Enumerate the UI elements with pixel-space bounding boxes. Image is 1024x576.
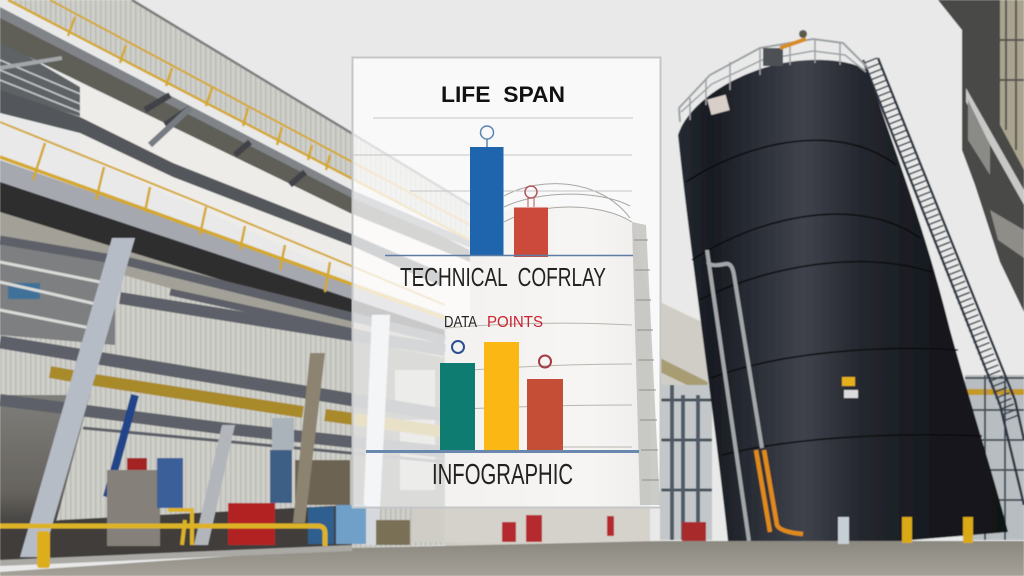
- red marker: [525, 186, 537, 207]
- red marker: [539, 356, 551, 368]
- blue marker: [452, 341, 464, 353]
- floor: [0, 541, 1024, 576]
- black tank: [678, 60, 1008, 541]
- yellow hazard label: [842, 377, 855, 386]
- glass and steel mass at far left: [0, 236, 115, 345]
- lower left wall: [0, 240, 445, 560]
- title: LIFE SPAN: [441, 82, 565, 107]
- red drum: [228, 503, 275, 545]
- white label: [844, 390, 858, 398]
- kerb: [0, 548, 352, 563]
- red fire equipment: [502, 515, 614, 542]
- baseline: [366, 450, 639, 453]
- orange-red bar: [527, 379, 563, 451]
- yellow pipe: [50, 372, 445, 432]
- right lower scaffold: [965, 375, 1024, 540]
- structural beams: [0, 58, 445, 462]
- lower bar chart: [366, 341, 639, 452]
- white wall between walkways: [80, 85, 470, 330]
- equipment below panel: [376, 508, 442, 545]
- lower left dark bay: [0, 395, 90, 545]
- second beam: [0, 90, 440, 286]
- red bar: [514, 208, 548, 257]
- dark interior behind overlay: [352, 335, 445, 507]
- chart gridlines: [352, 118, 633, 191]
- tank bollards: [838, 517, 973, 544]
- red vessel on rack: [127, 458, 147, 470]
- tank body: [678, 60, 1008, 541]
- upper deck underside: [0, 13, 470, 262]
- white tank dome railing seen through panel: [504, 184, 632, 222]
- technical overlay heading: TECHNICAL COFRLAY: [400, 262, 606, 292]
- blue riser: [107, 395, 135, 497]
- tank top railing: [679, 39, 868, 122]
- dark ground band: [0, 505, 352, 565]
- yellow ground railing: [0, 510, 325, 546]
- upper wall with corrugated cladding: [10, 0, 470, 240]
- roof equipment: [763, 30, 807, 66]
- white storage tank: [440, 205, 650, 560]
- yellow bollard: [37, 531, 50, 568]
- blue bar: [470, 147, 504, 256]
- teal bar: [440, 363, 475, 451]
- walkway two underside: [0, 178, 445, 345]
- upper left grey lattice: [0, 40, 85, 118]
- support columns: [20, 238, 390, 557]
- equipment rack: [107, 458, 183, 546]
- blue marker: [480, 126, 494, 147]
- yellow bar: [484, 342, 519, 451]
- walkway two deck: [0, 160, 445, 330]
- white tank ladder seen through panel: [632, 222, 660, 505]
- infographic content: [352, 82, 639, 491]
- right upper structure: [938, 0, 1024, 312]
- tank warning sign: [707, 95, 730, 115]
- access ladder: [863, 58, 1024, 505]
- translucent overlay panel: [352, 58, 660, 508]
- infographic heading: INFOGRAPHIC: [432, 459, 573, 491]
- pale band below walkway: [0, 212, 445, 358]
- baseline: [385, 254, 633, 256]
- data label: DATA: [444, 314, 477, 331]
- yellow walkway railings: [0, 0, 470, 318]
- building behind black tank: [660, 302, 712, 542]
- orange pipes: [756, 450, 803, 534]
- grey pipes: [707, 250, 762, 541]
- upper deck beam: [0, 7, 470, 248]
- points label: POINTS: [487, 314, 543, 331]
- tank seams: [686, 140, 982, 455]
- interior light patches: [395, 370, 435, 490]
- white tank seams seen through panel: [445, 323, 632, 447]
- top bar chart: [385, 126, 633, 257]
